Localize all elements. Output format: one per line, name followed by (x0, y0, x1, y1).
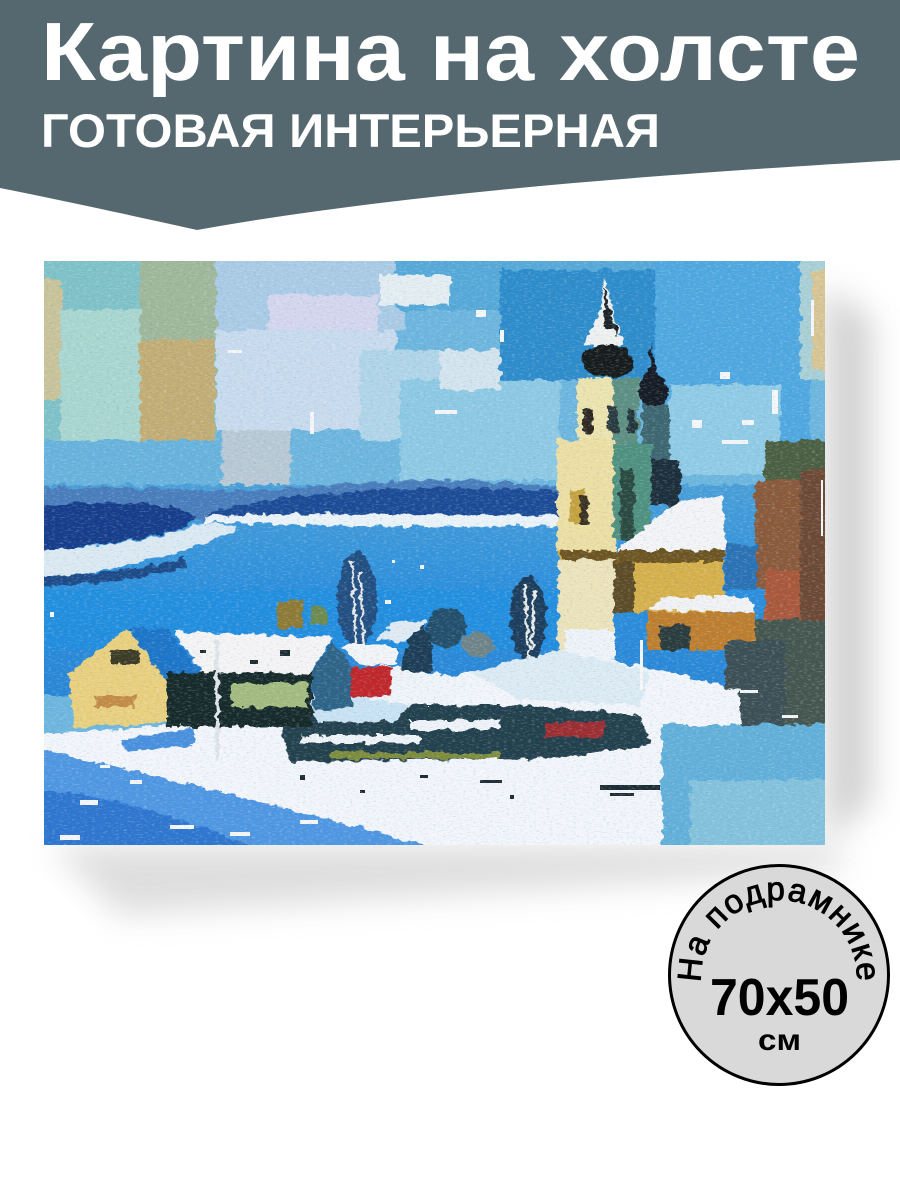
canvas shadow (50, 285, 872, 915)
right side trees (725, 441, 835, 730)
trees behind village (277, 552, 546, 660)
badge: size (668, 864, 890, 1086)
badge size value: 70x50 (710, 969, 849, 1027)
painting: winter village with church (30, 250, 840, 860)
pole (215, 640, 219, 760)
badge arc text: На подрамнике (677, 882, 875, 980)
houses (69, 621, 432, 728)
dark flecks (200, 650, 660, 799)
subtitle: ГОТОВАЯ ИНТЕРЬЕРНАЯ (41, 104, 660, 157)
paint flecks (50, 300, 823, 840)
title: Картина на холсте (41, 5, 860, 98)
snow field (30, 650, 832, 860)
canvas texture (44, 261, 825, 845)
sky (30, 250, 840, 490)
badge unit: см (758, 1024, 801, 1057)
far hills and lake (30, 480, 840, 695)
church (557, 277, 756, 660)
header banner (0, 0, 900, 230)
